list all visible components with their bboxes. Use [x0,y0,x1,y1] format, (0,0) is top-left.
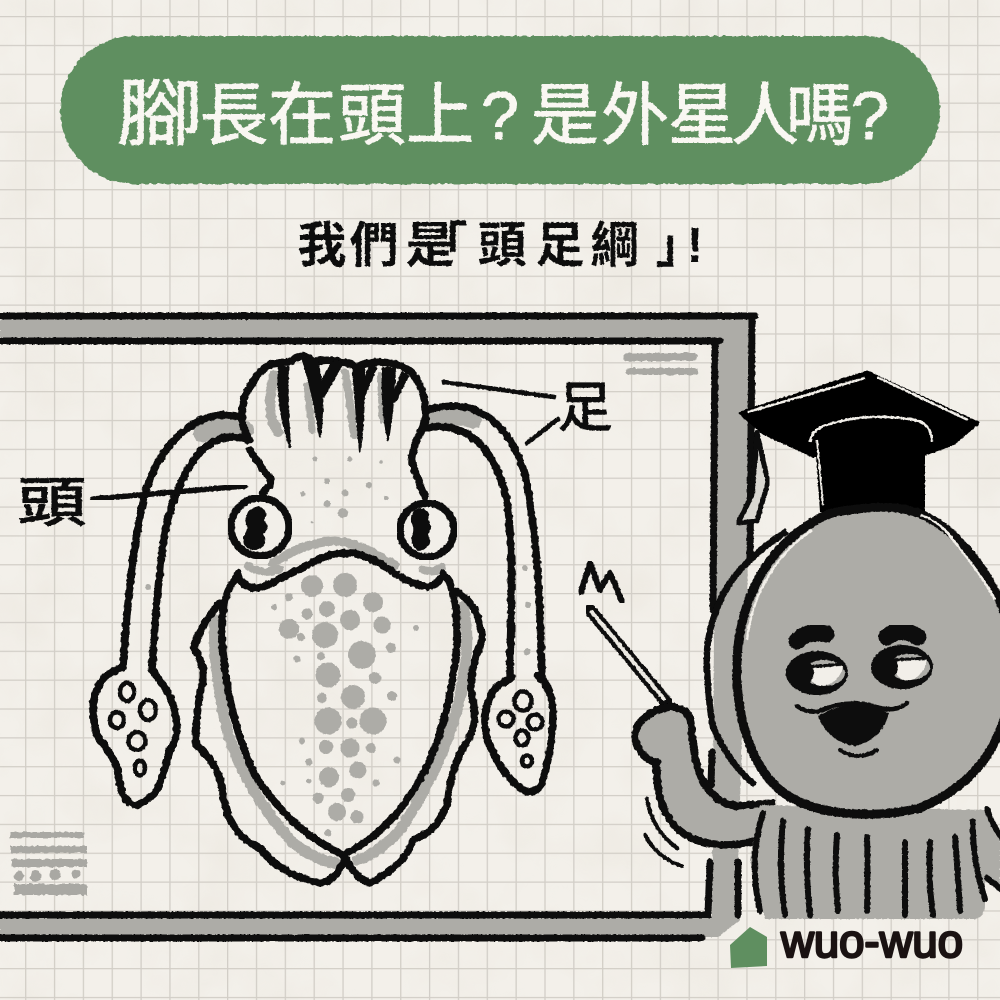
moustache [797,703,907,712]
squid fin: left [194,603,345,883]
label: 足: 足 [558,378,612,438]
face [786,632,933,756]
mortarboard top [740,372,978,505]
tassel [738,433,768,523]
squid arm: right [425,406,542,678]
squid black outlines [93,356,553,883]
eyebrow: left [797,633,826,641]
mortarboard cap body [815,440,925,515]
squid club suckers: right [498,692,542,766]
squid fin: right [347,592,482,883]
tentacle lines [755,809,1000,915]
leader line: 頭 [93,486,245,499]
motion lines [645,799,682,866]
squid diagram [93,356,553,883]
logo wordmark: wuo-wuo [780,915,963,967]
leader lines: 足 [444,382,558,443]
brand logo [730,915,963,968]
squid club: right [485,675,553,792]
title first character: 腳 [117,72,203,155]
tentacle skirt [750,805,1000,919]
squid eye: right [400,503,454,557]
eyebrow: right [887,632,918,637]
squid club: left [93,667,177,805]
subtitle: 我們是「頭足綱」! [297,219,705,273]
chin [840,750,877,756]
squid mantle collar [238,553,443,588]
squid mantle spots [145,456,531,836]
teacher arm and hand [635,707,772,845]
banner pill [60,36,940,184]
eye: right [871,645,933,689]
squid head [242,356,426,497]
squid tentacles on head [278,357,408,452]
squid mantle [222,577,457,855]
pointer stick [590,610,668,704]
title text: 長在頭上?是外星人嗎? [200,78,889,154]
beak [818,705,889,746]
logo house icon [730,927,767,968]
squid arm: left [123,415,248,670]
squid eye: left [231,498,289,556]
scribble note: bottom left of board [10,832,87,895]
eye: left [786,651,848,695]
squid gray shading [190,372,482,863]
back outline arm [707,531,787,785]
teacher character [590,372,1000,919]
title banner [60,36,940,184]
squid club suckers: left [110,683,156,776]
head [737,507,1000,814]
label: 頭: 頭 [18,473,86,533]
pointer spark [581,563,622,601]
scribble note: top right of board [623,353,698,375]
blackboard frame [0,316,755,938]
